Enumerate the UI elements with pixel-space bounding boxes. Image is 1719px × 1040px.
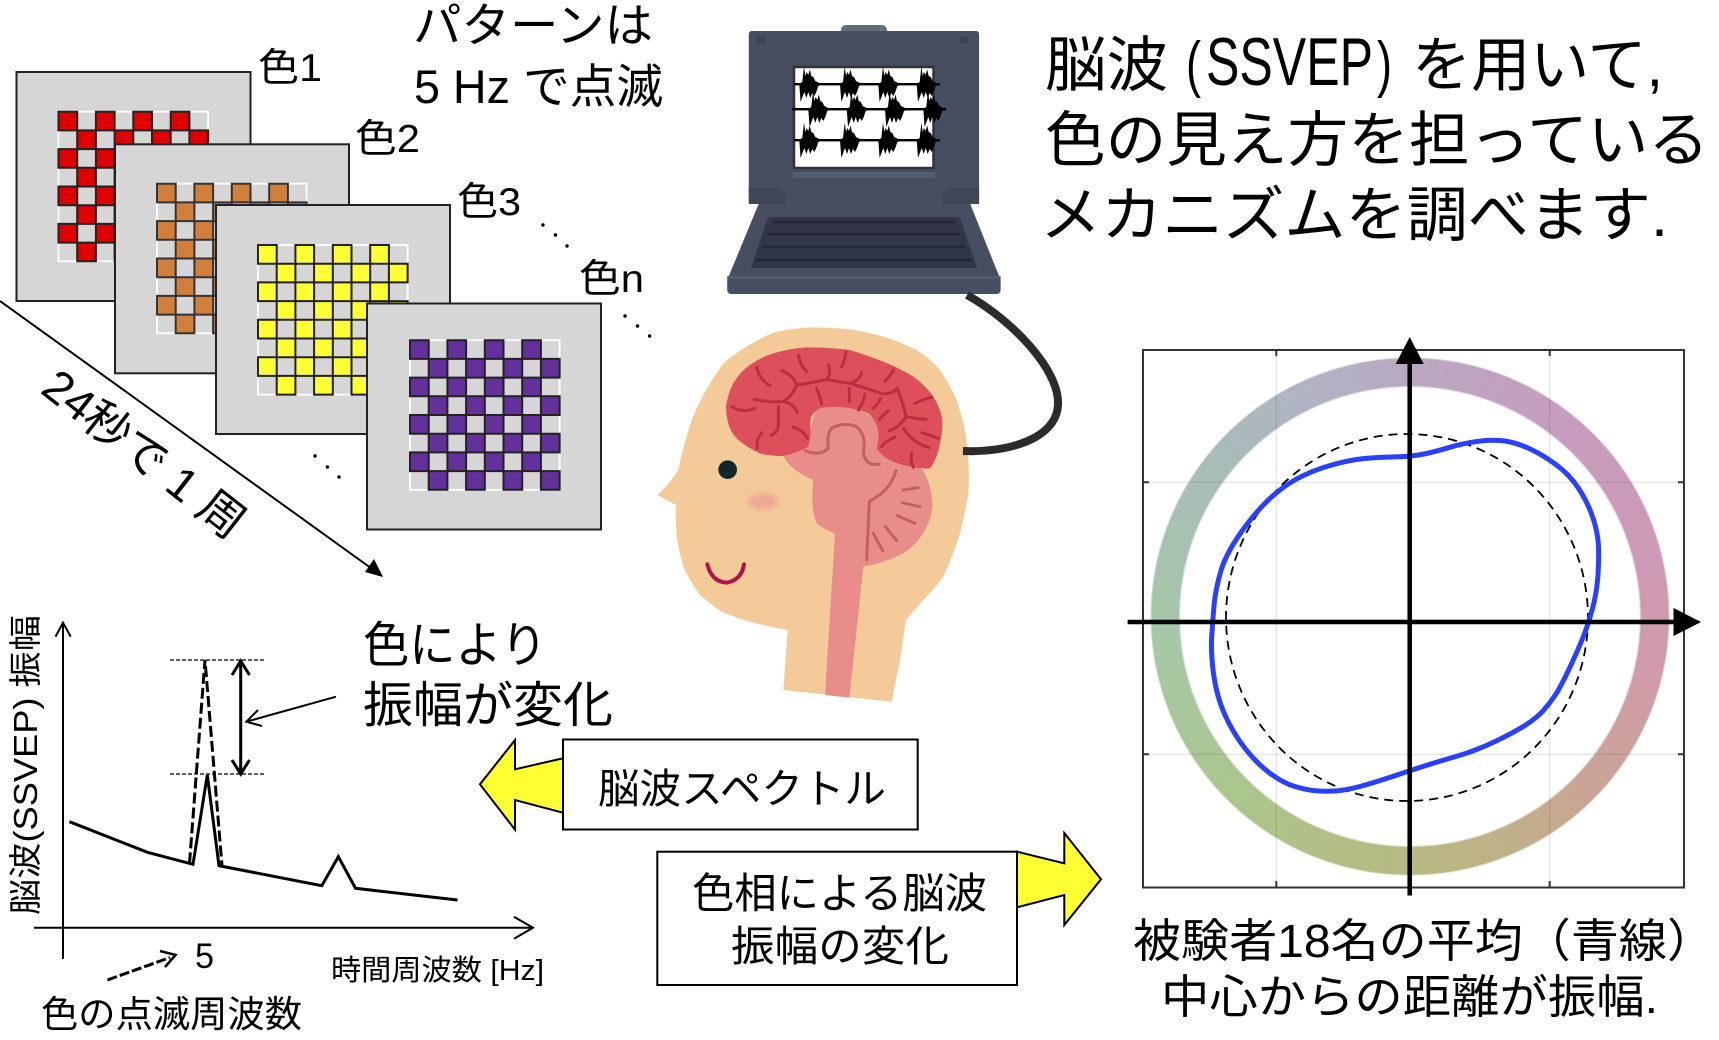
label: color 3: 色3	[457, 181, 521, 224]
eye	[718, 460, 737, 479]
cerebrum	[726, 347, 942, 468]
panel: color stimulus 3 (yellow)	[216, 205, 450, 434]
cable from laptop to head	[963, 295, 1058, 451]
title: を用いて,	[1412, 32, 1663, 99]
mouth	[707, 564, 744, 583]
box: EEG spectrum	[563, 740, 918, 830]
axes	[34, 623, 533, 959]
title: メカニズムを調べます.	[1040, 182, 1668, 249]
dashed arrow to 5	[108, 951, 176, 980]
text: pattern flicker note: パターンは	[413, 0, 653, 52]
arrow: time direction	[0, 301, 383, 577]
box: amplitude change by hue	[657, 852, 1017, 985]
title	[1040, 24, 1709, 249]
title: SSVEP	[1206, 24, 1373, 100]
box: EEG spectrum: 脳波スペクトル	[598, 766, 886, 812]
box: amplitude change by hue: 振幅の変化	[731, 923, 949, 970]
plot frame	[1143, 350, 1684, 888]
dotted guides	[170, 660, 264, 774]
caption: chart explanation: 中心からの距離が振幅.	[1161, 971, 1658, 1023]
label: color 2: 色2	[355, 118, 420, 161]
text: pattern flicker note	[413, 0, 663, 113]
label: color n: 色n	[579, 258, 644, 301]
axes with arrowheads	[1128, 337, 1701, 896]
dashed peak	[190, 660, 222, 866]
double arrow	[232, 661, 250, 774]
title: 脳波	[1045, 32, 1168, 99]
ellipsis dots	[313, 223, 651, 479]
y-axis label: 脳波(SSVEP) 振幅	[7, 615, 44, 915]
cerebellum and brainstem	[783, 403, 933, 698]
icon: laptop showing EEG	[727, 25, 1001, 294]
title: (	[1186, 30, 1201, 99]
box: amplitude change by hue: 色相による脳波	[692, 870, 987, 917]
x-axis label: 時間周波数 [Hz]	[331, 954, 544, 987]
mean amplitude curve	[1211, 440, 1599, 791]
pointer arrow	[246, 697, 336, 726]
text: pattern flicker note: 5 Hz で点滅	[414, 60, 663, 113]
solid spectrum	[69, 775, 458, 900]
cheek	[748, 494, 778, 510]
text: amplitude varies by color: 振幅が変化	[363, 679, 613, 733]
text: 24 seconds per cycle: 24秒で 1 周	[33, 359, 256, 549]
arrow: yellow pointing right	[1017, 833, 1101, 925]
icon: head with brain cross-section	[657, 327, 969, 702]
caption: chart explanation: 被験者18名の平均（青線）	[1133, 915, 1715, 967]
reference dashed circle	[1226, 434, 1588, 801]
panel: color stimulus 1 (red)	[16, 72, 250, 301]
x tick 5: 5	[195, 937, 214, 976]
polar chart: SSVEP amplitude by hue	[1128, 337, 1701, 896]
panel: color stimulus n (purple)	[367, 304, 601, 530]
label: color 1: 色1	[258, 47, 322, 90]
hue ring	[1150, 357, 1670, 876]
arrow: yellow pointing left	[480, 740, 563, 830]
grid lines and ticks	[1143, 350, 1684, 887]
text: amplitude varies by color	[363, 619, 613, 733]
text: amplitude varies by color: 色により	[363, 619, 547, 673]
panel: color stimulus 2 (orange)	[115, 144, 349, 373]
brain folds	[732, 352, 938, 467]
text: flicker frequency: 色の点滅周波数	[41, 994, 302, 1035]
title: )	[1377, 30, 1392, 99]
title: 色の見え方を担っている	[1045, 107, 1709, 174]
caption: chart explanation	[1133, 915, 1715, 1023]
spectrum chart	[7, 615, 544, 1035]
